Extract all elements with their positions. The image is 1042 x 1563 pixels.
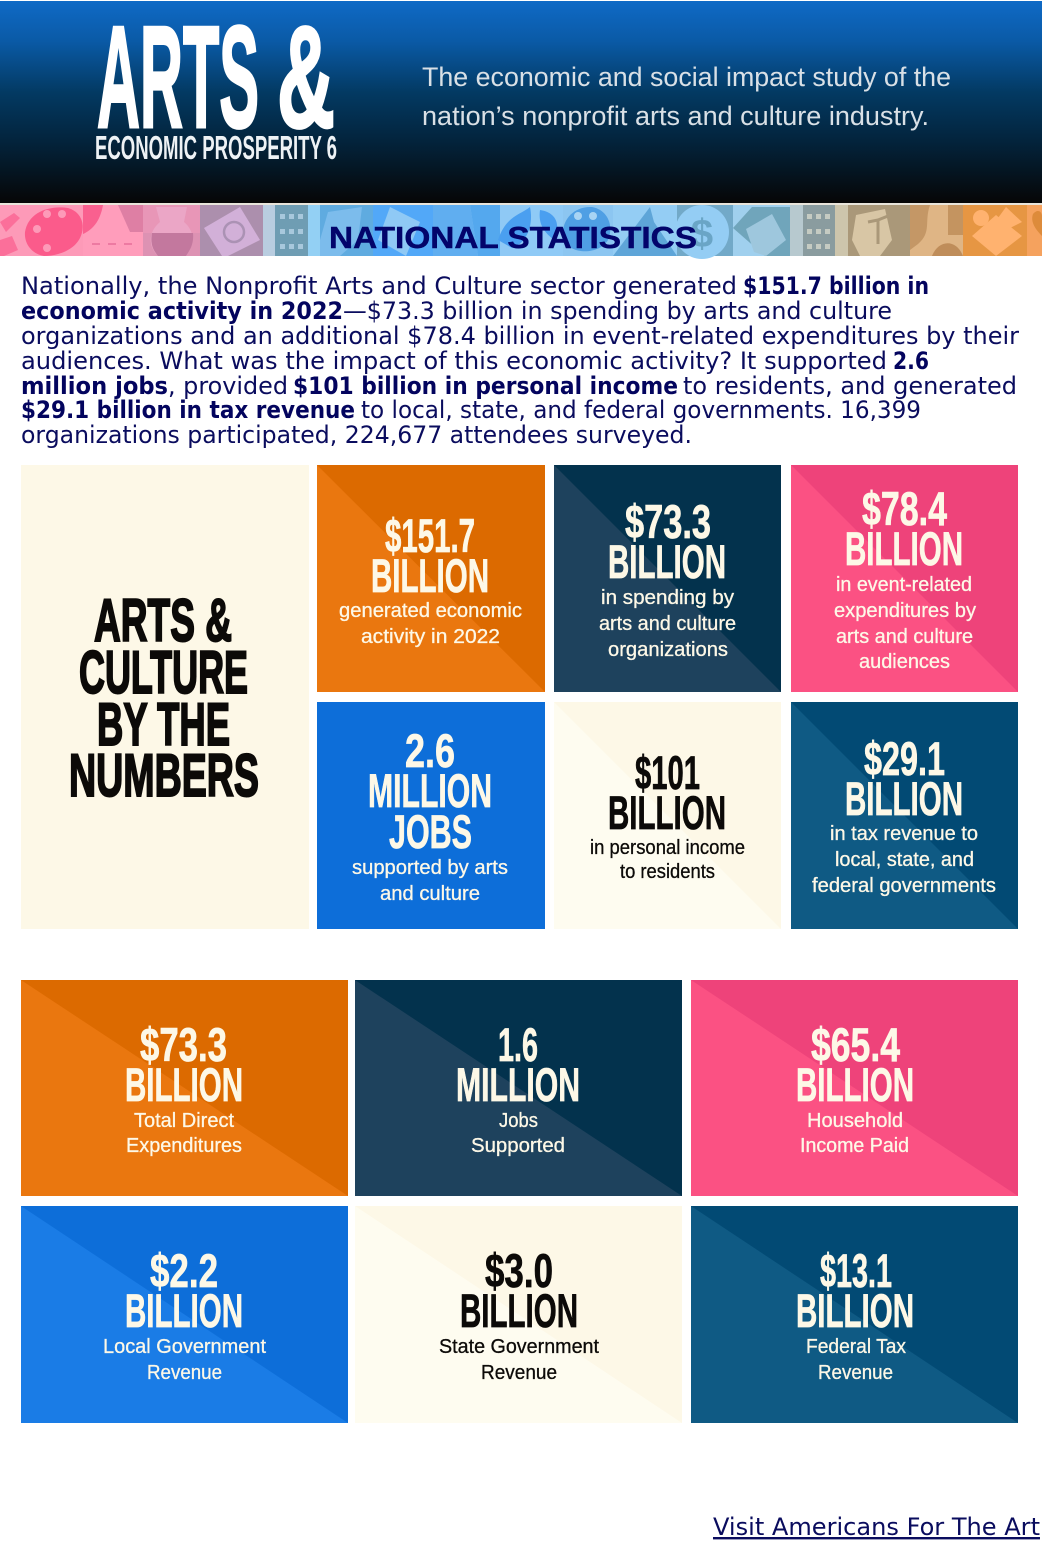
icon: camera	[200, 205, 263, 256]
card: $13.1 billion federal tax revenue: Revenue	[818, 1362, 893, 1384]
card: $3.0 billion state government revenue: State Government	[439, 1336, 599, 1358]
tagline: The economic and social impact study of the	[422, 62, 951, 92]
icon: palette	[25, 207, 83, 256]
intro paragraph: audiences. What was the impact of this economic activity? It supported	[21, 347, 887, 375]
tagline: nation’s nonprofit arts and culture industry.	[422, 101, 929, 131]
card: 1.6 million jobs supported: Supported	[471, 1135, 565, 1157]
logo: Arts & Economic Prosperity 6: &	[277, 0, 335, 158]
card: 2.6 million jobs: and culture	[380, 883, 480, 905]
icon: theatre mask	[733, 205, 790, 256]
intro paragraph: $101 billion in personal income	[293, 372, 678, 400]
panel: arts and culture by the numbers: ARTS &	[94, 587, 232, 654]
card: $29.1 billion: BILLION	[845, 772, 963, 825]
card: $29.1 billion: federal governments	[812, 875, 996, 897]
intro paragraph: —$73.3 billion in spending by arts and culture	[343, 297, 892, 325]
card: $73.3 billion: BILLION	[608, 535, 726, 588]
card: 2.6 million jobs: MILLION	[368, 764, 492, 817]
card: 1.6 million jobs supported: 1.6	[498, 1018, 538, 1071]
header banner	[0, 0, 1042, 203]
card: $101 billion: $101	[635, 746, 700, 799]
card: $151.7 billion: $151.7	[385, 509, 475, 562]
intro paragraph: , provided	[168, 372, 288, 400]
card: $3.0 billion state government revenue: Revenue	[481, 1362, 557, 1384]
card: $73.3 billion total direct expenditures: $73.3	[140, 1018, 227, 1071]
card: $101 billion: to residents	[620, 861, 715, 883]
icon: figure silhouette	[910, 205, 963, 256]
intro paragraph: Nationally, the Nonprofit Arts and Culture sector generated	[21, 272, 737, 300]
card: 2.6 million jobs	[317, 702, 545, 929]
card: $73.3 billion total direct expenditures: BILLION	[125, 1058, 243, 1111]
intro paragraph: to residents, and generated	[683, 372, 1017, 400]
heading: national statistics: NATIONAL STATISTICS	[329, 220, 697, 255]
card: $29.1 billion: in tax revenue to	[830, 823, 978, 845]
card: 1.6 million jobs supported: MILLION	[456, 1058, 580, 1111]
card: $73.3 billion	[554, 465, 781, 692]
card: $78.4 billion	[791, 465, 1018, 692]
card: $65.4 billion household income paid: Income Paid	[800, 1135, 909, 1157]
intro paragraph: million jobs	[21, 372, 168, 400]
card: $73.3 billion total direct expenditures: Expenditures	[126, 1135, 242, 1157]
card: $3.0 billion state government revenue: BILLION	[460, 1284, 578, 1337]
card: $13.1 billion federal tax revenue	[691, 1206, 1018, 1423]
card: $3.0 billion state government revenue	[355, 1206, 682, 1423]
card: $65.4 billion household income paid	[691, 980, 1018, 1196]
card: 1.6 million jobs supported	[355, 980, 682, 1196]
icon: diamond pattern	[963, 205, 1027, 256]
card: $29.1 billion	[791, 702, 1018, 929]
card: $2.2 billion local government revenue: BILLION	[125, 1284, 243, 1337]
panel: arts and culture by the numbers	[21, 465, 309, 929]
card: $151.7 billion: BILLION	[371, 549, 489, 602]
card: $29.1 billion: local, state, and	[835, 849, 974, 871]
card: $65.4 billion household income paid: $65.4	[811, 1018, 900, 1071]
card: $2.2 billion local government revenue: $2.2	[150, 1244, 218, 1297]
icon: dollar circle: $	[691, 212, 713, 256]
icon: film strip neutral	[803, 205, 835, 256]
panel: arts and culture by the numbers: BY THE	[97, 691, 230, 758]
card: $78.4 billion: BILLION	[845, 522, 963, 575]
panel: arts and culture by the numbers: CULTURE	[79, 639, 248, 706]
card: $101 billion: in personal income	[590, 837, 745, 859]
card: $73.3 billion total direct expenditures: Total Direct	[134, 1110, 234, 1132]
card: $78.4 billion: in event-related	[836, 574, 972, 596]
card: 2.6 million jobs: 2.6	[405, 724, 455, 777]
card: $78.4 billion: expenditures by	[834, 600, 976, 622]
card: $78.4 billion: arts and culture	[836, 626, 973, 648]
card: $78.4 billion: audiences	[859, 651, 950, 673]
card: $3.0 billion state government revenue: $3.0	[485, 1244, 553, 1297]
card: $73.3 billion total direct expenditures	[21, 980, 348, 1196]
icon: music note	[848, 205, 910, 256]
card: $151.7 billion: activity in 2022	[361, 626, 500, 648]
logo: Arts & Economic Prosperity 6: ARTS	[97, 0, 259, 158]
card: $151.7 billion	[317, 465, 545, 692]
card: $2.2 billion local government revenue: Local Government	[103, 1336, 266, 1358]
card: $2.2 billion local government revenue: Revenue	[147, 1362, 222, 1384]
card: $73.3 billion: arts and culture	[599, 613, 736, 635]
card: 2.6 million jobs: JOBS	[389, 805, 472, 858]
card: $65.4 billion household income paid: Household	[807, 1110, 903, 1132]
panel: arts and culture by the numbers: NUMBERS	[69, 742, 259, 809]
card: $29.1 billion: $29.1	[864, 732, 945, 785]
card: 2.6 million jobs: supported by arts	[352, 857, 508, 879]
card: $78.4 billion: $78.4	[862, 482, 947, 535]
card: $13.1 billion federal tax revenue: $13.1	[820, 1244, 892, 1297]
card: $73.3 billion: in spending by	[601, 587, 734, 609]
card: $65.4 billion household income paid: BILLION	[796, 1058, 914, 1111]
card: $101 billion	[554, 702, 781, 929]
intro paragraph: to local, state, and federal governments. 16,399	[361, 396, 921, 424]
intro paragraph: organizations and an additional $78.4 billion in event-related expenditures by their	[21, 322, 1019, 350]
intro paragraph: organizations participated, 224,677 attendees surveyed.	[21, 421, 692, 449]
tagline	[422, 62, 951, 131]
national statistics patterned band	[0, 203, 1042, 259]
icon: film strip	[275, 205, 308, 256]
card: $2.2 billion local government revenue	[21, 1206, 348, 1423]
icon: vase	[143, 205, 200, 256]
logo: Arts & Economic Prosperity 6	[95, 0, 337, 166]
card: $73.3 billion: $73.3	[625, 495, 711, 548]
intro paragraph: 2.6	[893, 347, 929, 375]
icon: dollar circle	[675, 205, 733, 259]
icon: palette blue	[563, 205, 613, 256]
card: $101 billion: BILLION	[608, 786, 726, 839]
logo: Arts & Economic Prosperity 6: ECONOMIC PROSPERITY 6	[95, 129, 337, 166]
link: visit americans for the art: Visit Americans For The Art	[713, 1513, 1040, 1541]
intro paragraph: economic activity in 2022	[21, 297, 343, 325]
intro paragraph: $29.1 billion in tax revenue	[21, 396, 355, 424]
intro paragraph	[21, 272, 1019, 449]
card: $73.3 billion: organizations	[608, 639, 728, 661]
intro paragraph: $151.7 billion in	[743, 272, 929, 300]
card: $13.1 billion federal tax revenue: BILLION	[796, 1284, 914, 1337]
card: $151.7 billion: generated economic	[339, 600, 522, 622]
card: 1.6 million jobs supported: Jobs	[499, 1110, 538, 1132]
card: $13.1 billion federal tax revenue: Federal Tax	[806, 1336, 906, 1358]
